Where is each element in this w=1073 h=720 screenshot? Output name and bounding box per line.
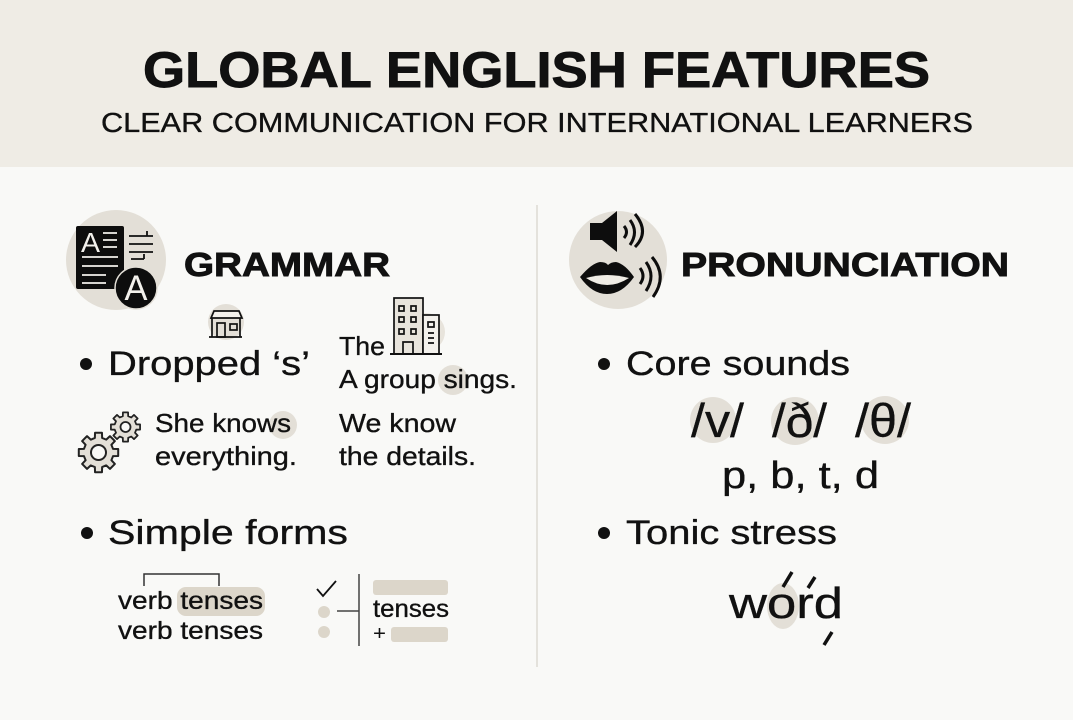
icon: speaker and lips [569, 211, 667, 309]
icon: grammar document: A [81, 227, 100, 258]
heading: pronunciation: PRONUNCIATION [681, 246, 1009, 283]
heading: grammar: GRAMMAR [184, 246, 390, 283]
panel: pronunciation [569, 211, 1009, 645]
example: she knows everything [155, 408, 297, 471]
header band [0, 0, 1073, 167]
phonetic symbols: /θ/ [855, 394, 912, 447]
icon: grammar document [66, 210, 166, 310]
title: GLOBAL ENGLISH FEATURES [143, 42, 930, 98]
example: we know the details [339, 408, 476, 471]
example: verb tenses bracket [118, 574, 265, 645]
example: she knows everything: She knows [155, 408, 291, 438]
example: we know the details: We know [339, 408, 456, 438]
diagram: tense options: tenses [373, 595, 449, 623]
example: we know the details: the details. [339, 441, 476, 471]
example: the group sings: A group sings. [339, 364, 517, 394]
subtitle: CLEAR COMMUNICATION FOR INTERNATIONAL LEARNERS [101, 107, 973, 138]
phonetic symbols [690, 394, 912, 447]
bullet: dropped s: Dropped ‘s’ [108, 345, 310, 383]
example: the group sings [339, 331, 517, 395]
icon: grammar document: A [124, 269, 148, 308]
icon: gears [79, 412, 140, 472]
example: the group sings: The [339, 331, 385, 361]
bullet: core sounds: Core sounds [626, 345, 850, 383]
phonetic symbols: /ð/ [772, 394, 828, 447]
icon: store [208, 304, 244, 340]
bullet: tonic stress: Tonic stress [626, 514, 837, 552]
stressed word: word [728, 579, 843, 628]
bullet: simple forms: Simple forms [108, 514, 348, 552]
consonants list: p, b, t, d [722, 455, 879, 497]
phonetic symbols: /v/ [691, 394, 745, 447]
panel: grammar [66, 210, 517, 646]
stressed word [728, 572, 843, 645]
icon: office building [390, 298, 445, 354]
example: verb tenses bracket: verb tenses [118, 617, 263, 645]
diagram: tense options: + [373, 623, 386, 645]
example: verb tenses bracket: verb tenses [118, 587, 263, 615]
diagram: tense options [317, 574, 449, 646]
example: she knows everything: everything. [155, 441, 297, 471]
